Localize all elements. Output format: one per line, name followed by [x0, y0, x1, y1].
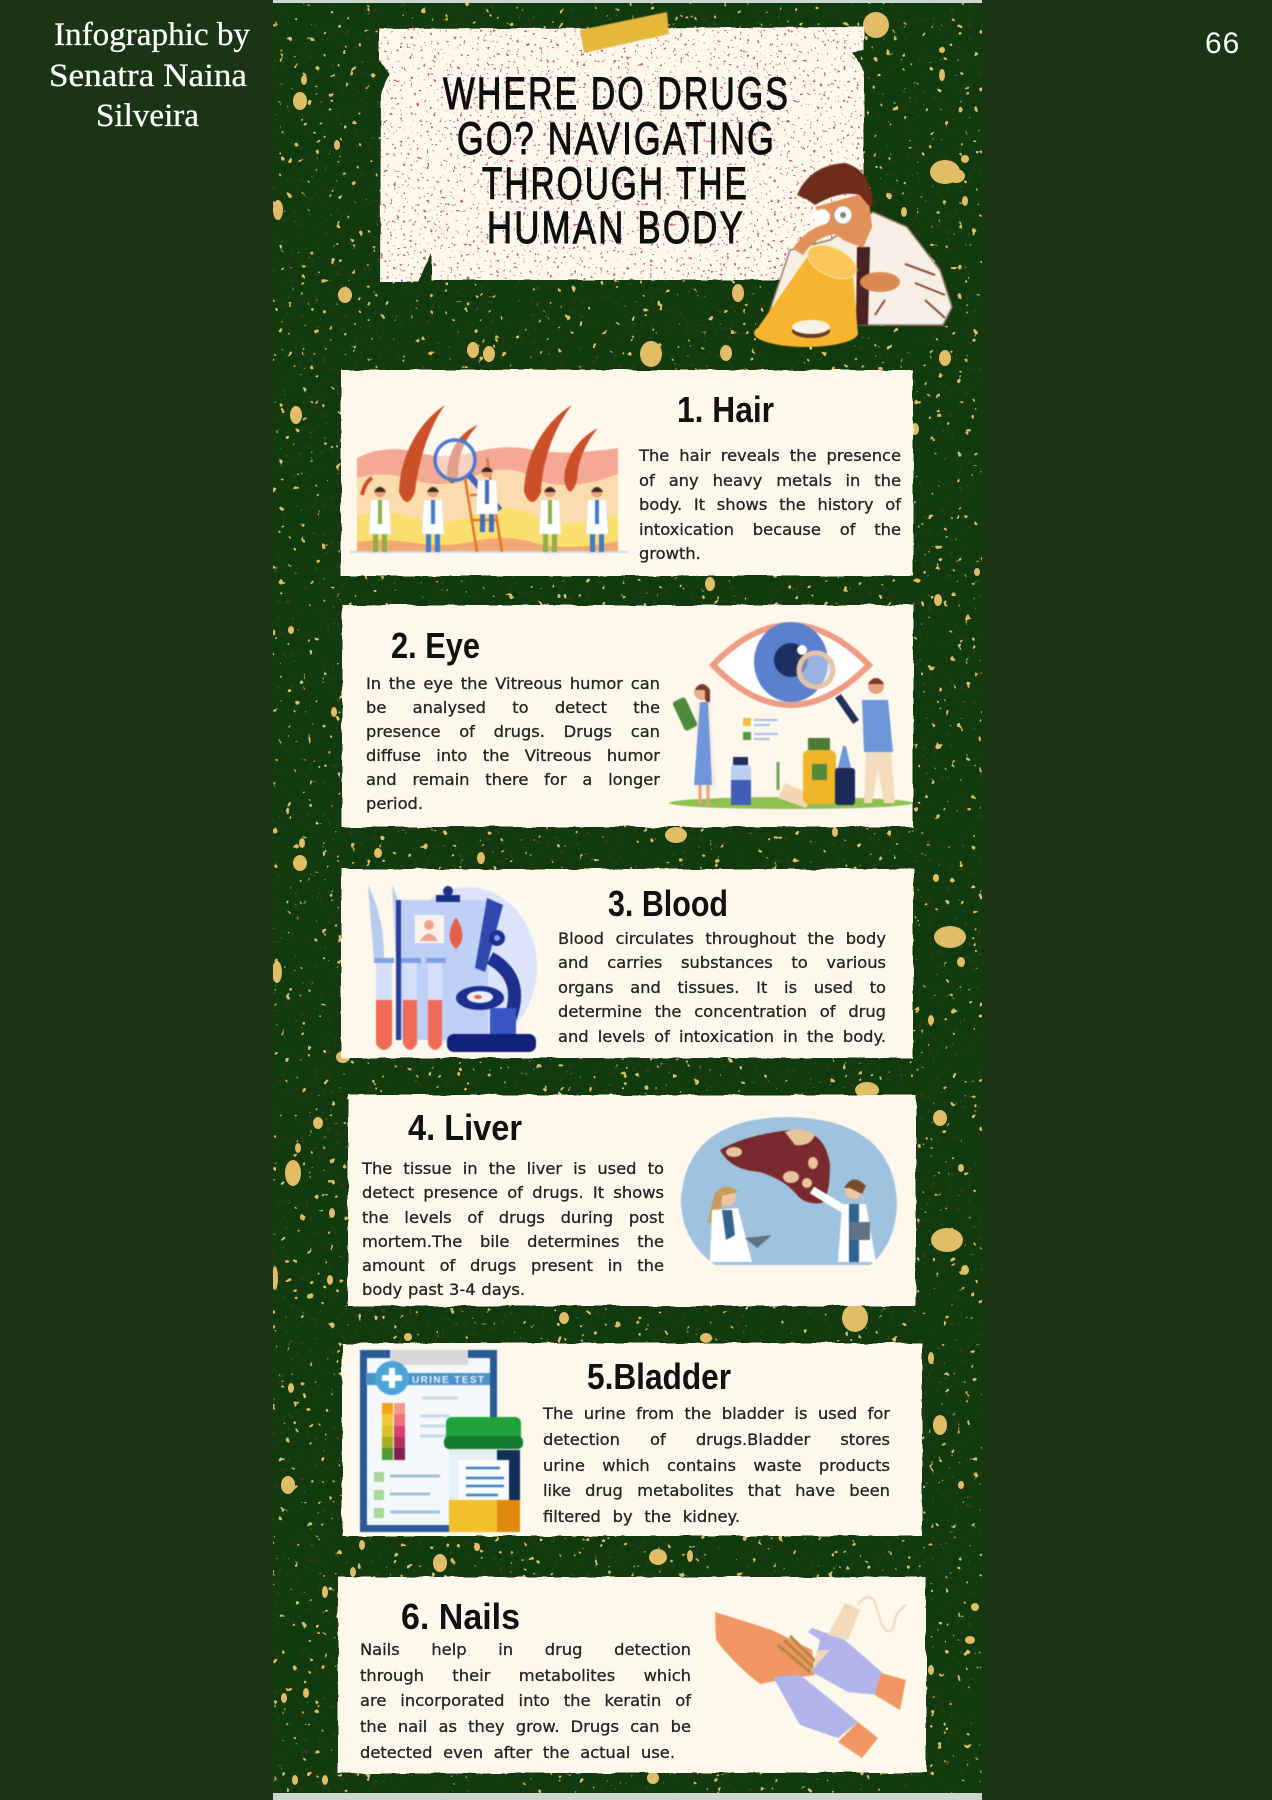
body text: filtered by the kidney. [543, 1507, 740, 1526]
body text: detection of drugs.Bladder stores [543, 1430, 890, 1449]
heading: 6. Nails [401, 1596, 520, 1637]
paper [341, 869, 913, 1058]
background speckled column [273, 0, 982, 1800]
heading: 4. Liver [408, 1107, 522, 1148]
icon: scientist with microscope light [754, 163, 952, 347]
body text: The urine from the bladder is used for [543, 1404, 890, 1423]
title text: HUMAN BODY [487, 202, 745, 253]
illustration: eye examination [669, 622, 913, 809]
body text: period. [366, 794, 423, 813]
illustration: blood tubes and microscope [368, 885, 537, 1052]
body text: are incorporated into the keratin of [360, 1691, 691, 1710]
body text: and levels of intoxication in the body. [558, 1027, 886, 1046]
body text: be analysed to detect the [366, 698, 660, 717]
title text: WHERE DO DRUGS [443, 68, 790, 119]
paper [348, 1095, 916, 1306]
illustration: liver and doctors [681, 1117, 897, 1265]
credit: infographic author: Silveira [96, 98, 199, 134]
panel: 3 blood [340, 868, 914, 1059]
body text: and remain there for a longer [366, 770, 660, 789]
title text: GO? NAVIGATING [457, 113, 776, 164]
illustration: gloved hands treating nails [715, 1597, 906, 1758]
body text: and carries substances to various [558, 953, 886, 972]
illustration: urine test clipboard and jar [360, 1350, 523, 1532]
body text: like drug metabolites that have been [543, 1481, 890, 1500]
body text: body. It shows the history of [639, 495, 901, 514]
body text [638, 446, 902, 563]
page number: 66 [1205, 27, 1240, 60]
body text: detected even after the actual use. [360, 1743, 675, 1762]
body text: diffuse into the Vitreous humor [366, 746, 660, 765]
credit: infographic author [49, 17, 250, 134]
body text: of any heavy metals in the [639, 470, 901, 490]
illustration: urine test clipboard and jar: URINE TEST [412, 1375, 484, 1386]
body text: urine which contains waste products [543, 1456, 890, 1475]
body text: through their metabolites which [360, 1666, 691, 1685]
credit: infographic author: Infographic by [54, 17, 250, 53]
paper [342, 605, 913, 827]
heading: 1. Hair [677, 389, 774, 430]
credit: infographic author: Senatra Naina [49, 58, 247, 94]
body text [360, 1640, 692, 1762]
body text: intoxication because of the [639, 520, 901, 538]
paper [342, 1343, 922, 1536]
body text: mortem.The bile determines the [362, 1232, 664, 1251]
body text: determine the concentration of drug [558, 1002, 886, 1021]
body text: growth. [639, 544, 701, 563]
paper [338, 1577, 926, 1773]
body text: detect presence of drugs. It shows [362, 1183, 664, 1202]
body text: In the eye the Vitreous humor can [366, 674, 660, 693]
panel: 4 liver [347, 1094, 917, 1308]
panel: 5 bladder [341, 1342, 923, 1537]
body text: the nail as they grow. Drugs can be [360, 1717, 691, 1736]
panel: 6 nails [337, 1576, 927, 1774]
title text [443, 68, 790, 253]
body text [366, 674, 660, 813]
body text: the levels of drugs during post [362, 1208, 664, 1227]
heading: 3. Blood [608, 883, 728, 924]
body text: amount of drugs present in the [362, 1256, 664, 1275]
body text: Nails help in drug detection [360, 1640, 691, 1659]
paper [341, 370, 913, 576]
heading: 2. Eye [391, 625, 480, 666]
heading: 5.Bladder [587, 1356, 731, 1397]
body text: The hair reveals the presence [639, 446, 901, 465]
panel: title [378, 12, 954, 348]
body text [558, 929, 886, 1046]
illustration: hair follicle and scientists [350, 405, 628, 552]
torn title paper [379, 27, 864, 282]
panel: 2 eye [341, 604, 914, 828]
body text: organs and tissues. It is used to [558, 978, 886, 997]
body text [542, 1404, 890, 1526]
yellow tape [580, 12, 669, 53]
body text: body past 3-4 days. [362, 1280, 525, 1299]
body text: The tissue in the liver is used to [362, 1159, 664, 1178]
body text: Blood circulates throughout the body [558, 929, 886, 948]
body text: presence of drugs. Drugs can [366, 722, 660, 741]
panel: 1 hair [340, 369, 914, 577]
title text: THROUGH THE [482, 158, 749, 209]
body text [362, 1159, 664, 1299]
